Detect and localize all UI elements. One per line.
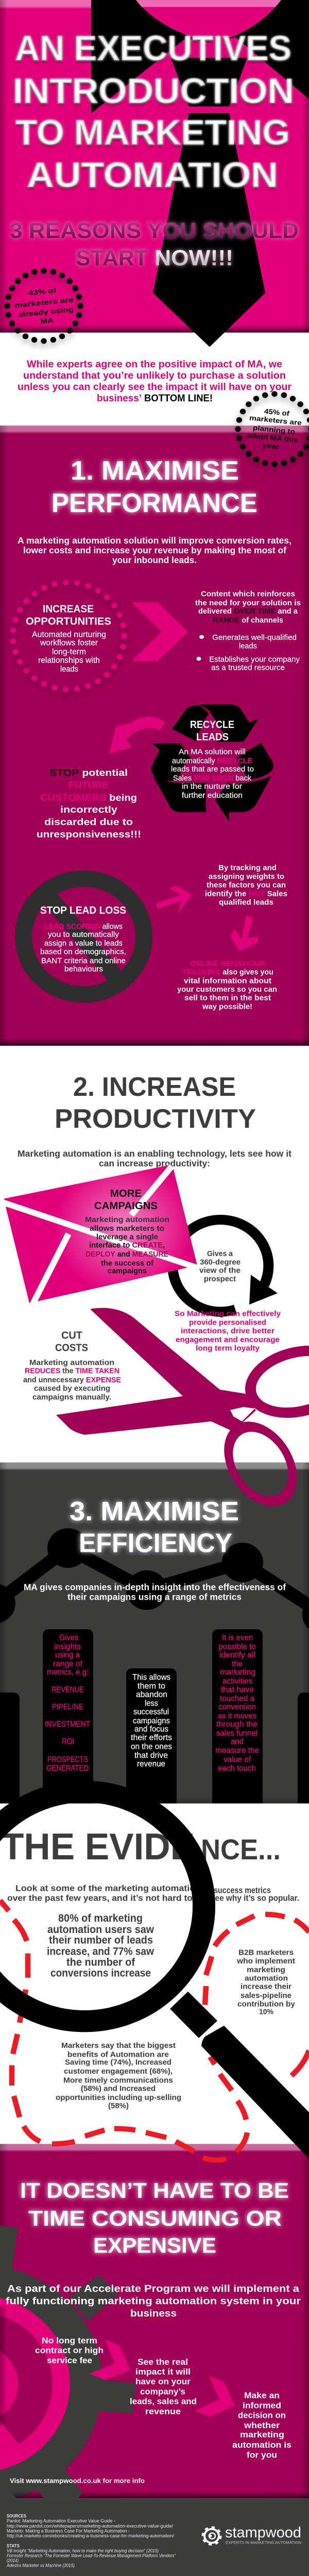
text block: by tracking: By tracking and: [218, 864, 277, 872]
text block: identify all activities: marketing: [220, 1668, 255, 1677]
text block: marketers say: benefits of Automation are: [67, 2051, 169, 2059]
bottom shade: [0, 2492, 309, 2498]
panel: intro text: understand that you’re unlikely to purchase a solution: [23, 370, 286, 381]
panel: increase opportunities: long-term: [52, 648, 86, 656]
badge: 43% of marketers: MA: [40, 316, 54, 325]
text block: stop lead loss: [40, 905, 126, 974]
icon: gear: [0, 2226, 136, 2504]
text block: 360-degree view: [199, 1250, 241, 1283]
text block: sources and stats: Pardot: Marketing Automation Executive Value Guide -: [7, 2518, 115, 2524]
text block: stop potential future customers: discarded due to: [44, 817, 133, 827]
text block: section 1 intro: your inbound leads.: [112, 555, 197, 565]
text block: see the real impact: have on your: [135, 2377, 191, 2386]
icon: envelope: [2, 1165, 198, 1306]
text block: sources and stats: Marketo: Making a Business Case For Marketing Automation -: [7, 2529, 130, 2534]
text block: online behaviour tracking: way possible!: [202, 1003, 252, 1011]
text block: so marketing can: provide personalised: [189, 1319, 266, 1327]
text block: abandon less successful: [131, 1673, 172, 1768]
badge: 45% of marketers: marketers are: [249, 414, 302, 427]
text block: abandon less successful: that drive: [134, 1751, 168, 1760]
text block: more campaigns: CAMPAIGNS: [94, 1200, 158, 1212]
heading: 1. Maximise Performance: [52, 456, 258, 518]
heading: it doesn't have to be: IT DOESN’T HAVE TO BE: [20, 2179, 289, 2202]
text block: more campaigns: leverage a single: [96, 1233, 158, 1241]
text block: see the real impact: leads, sales and: [130, 2396, 197, 2406]
text block: abandon less successful: their efforts: [131, 1734, 172, 1742]
text block: see the real impact: revenue: [145, 2406, 181, 2416]
text block: stop lead loss: based on demographics,: [40, 948, 126, 956]
text block: B2B marketers: [236, 1949, 296, 2016]
text block: metrics bar: range of: [53, 1660, 83, 1668]
chart: red dashed speech bubbles: [0, 1901, 309, 2160]
icon: prohibition sign: [24, 879, 144, 994]
text block: metrics bar: using a: [55, 1651, 80, 1659]
text block: metrics bar: PIPELINE: [52, 1703, 83, 1711]
icon: chevron arrow: [131, 602, 188, 661]
text block: visit website: Visit www.stampwood.co.uk for more info: [10, 2477, 145, 2484]
text block: identify all activities: activities: [222, 1677, 252, 1686]
text block: identify all activities: as it moves: [218, 1712, 256, 1720]
text block: 80% of users: 80% of marketing: [58, 1911, 143, 1924]
text block: cut costs: CUT: [61, 1330, 82, 1341]
text block: recycle leads: in the nurture for: [182, 783, 242, 791]
text block: no long term contract: [35, 2335, 104, 2365]
panel: increase opportunities: relationships with: [38, 656, 100, 665]
text block: accelerate program: [6, 2283, 301, 2319]
text block: stop potential future customers: CUSTOMERS being: [40, 792, 137, 803]
text block: metrics bar: Gives: [59, 1634, 78, 1642]
text block: sources and stats: Forrester Research “The Forrester Wave Lead-To-Revenue Management Platform Vendors”: [7, 2553, 176, 2558]
text block: recycle leads: [171, 719, 254, 800]
text block: content which reinforces: delivered OVER TIME and a: [198, 607, 298, 616]
text block: see the real impact: company’s: [140, 2386, 185, 2396]
badge: 45% of marketers: 45% of: [264, 408, 290, 417]
text block: B2B marketers: automation: [245, 1975, 288, 1982]
text block: abandon less successful: less: [145, 1700, 158, 1708]
text block: accelerate program: As part of our Accelerate Program we will implement a: [7, 2283, 300, 2295]
text block: make an informed decision: [232, 2390, 291, 2460]
text block: 80% of users: increase, and 77% saw: [47, 1945, 154, 1957]
text block: sources and stats: STATS: [7, 2543, 20, 2549]
text block: content which reinforces: as a trusted resource: [211, 664, 285, 672]
text block: by tracking: [205, 864, 287, 907]
text block: section 2 intro: can increase productivity:: [99, 1158, 210, 1168]
text block: B2B marketers: sales-pipeline: [241, 1992, 291, 2000]
panel: increase opportunities: OPPORTUNITIES: [26, 616, 111, 627]
text block: recycle leads: Sales TOO SOON back: [173, 774, 252, 783]
text block: metrics bar: ROI: [62, 1737, 74, 1746]
panel: intro text: unless you can clearly see the impact it will have on your: [18, 381, 291, 393]
text block: make an informed decision: informed: [243, 2400, 281, 2410]
text block: recycle leads: An MA solution will: [179, 748, 246, 756]
text block: content which reinforces: RANGE of channels: [213, 617, 283, 624]
text block: content which reinforces: Generates well-qualified: [212, 634, 297, 642]
badge: 43% of marketers: marketers are: [14, 296, 74, 309]
text block: 80% of users: automation users saw: [47, 1923, 154, 1936]
text block: more campaigns: DEPLOY and MEASURE: [85, 1250, 168, 1259]
text block: evidence intro: success metrics: [214, 1885, 271, 1895]
subtitle: START: [76, 246, 148, 270]
text block: evidence intro: [7, 1883, 299, 1903]
text block: marketers say: Saving time (74%), Increased: [65, 2059, 171, 2067]
text block: accelerate program: business: [130, 2308, 177, 2319]
text block: sources and stats: Adestra Marketer vs Machine (2015): [6, 2563, 75, 2569]
neck highlight: [136, 0, 281, 7]
text block: more campaigns: [85, 1188, 169, 1276]
text block: no long term contract: service fee: [47, 2355, 92, 2365]
text block: make an informed decision: marketing: [240, 2429, 284, 2439]
text block: stop lead loss: BANT criteria and online: [41, 957, 126, 965]
text block: evidence intro: see why it’s so popular.: [211, 1893, 299, 1903]
text block: stop lead loss: assign a value to leads: [44, 940, 123, 948]
panel: section 3 background: [0, 1463, 309, 1803]
text block: stop potential future customers: STOP potential: [49, 768, 128, 778]
text block: content which reinforces: leads: [239, 642, 257, 650]
text block: 360-degree view: prospect: [204, 1275, 236, 1283]
text block: by tracking: assigning weights to: [209, 873, 284, 881]
text block: more campaigns: Marketing automation: [85, 1216, 169, 1224]
title: AUTOMATION: [27, 155, 278, 195]
text block: section 1 intro: [18, 535, 291, 565]
panel: hero header: [0, 0, 309, 347]
text block: identify all activities: [215, 1634, 259, 1773]
text block: section 2 intro: [18, 1148, 291, 1168]
icon: pink arrow down: [230, 916, 259, 951]
subtitle: NOW!!!: [154, 246, 233, 270]
icon: magnifying glass: [0, 1791, 309, 2159]
icon: curved pink arrow: [109, 717, 165, 754]
text block: section 3 intro: their campaigns using a range of metrics: [67, 1592, 242, 1602]
panel: increase opportunities: Automated nurturing: [32, 631, 106, 639]
text block: online behaviour tracking: your customers so you can: [177, 986, 277, 994]
text block: online behaviour tracking: TRACKING also gives you: [182, 969, 273, 976]
title: TO MARKETING: [15, 113, 290, 152]
badge: 43% of marketers: 43% of: [28, 286, 57, 297]
icon: circular arrow: [173, 1219, 278, 1312]
text block: online behaviour tracking: [177, 960, 277, 1011]
text block: identify all activities: sales funnel: [216, 1729, 258, 1738]
logo: stampwood: EXPERTS IN MARKETING AUTOMATION: [226, 2540, 301, 2545]
text block: identify all activities: touched a: [220, 1694, 254, 1703]
gear lower outline: [0, 2467, 82, 2498]
text block: make an informed decision: decision on: [238, 2410, 286, 2420]
title: AN EXECUTIVES: [15, 28, 291, 68]
text block: no long term contract: contract or high: [35, 2345, 104, 2355]
text block: accelerate program: fully functioning marketing automation system in your: [6, 2296, 301, 2307]
text block: 80% of users: their number of leads: [49, 1934, 153, 1946]
text block: section 1 intro: A marketing automation solution will improve conversion rates,: [18, 535, 291, 546]
text block: stop potential future customers: unresponsiveness!!!: [37, 829, 141, 839]
panel: footer background: [0, 2498, 309, 2576]
text block: content which reinforces: the need for your solution is: [195, 599, 301, 607]
text block: identify all activities: through the: [216, 1720, 258, 1729]
heading: The Evidence: NCE...: [201, 1834, 281, 1866]
text block: content which reinforces: Content which reinforces: [201, 590, 295, 598]
badge: 45% of marketers: [238, 394, 309, 464]
text block: abandon less successful: abandon: [136, 1690, 167, 1699]
text block: marketers say: (58%): [108, 2102, 129, 2110]
badge: 45% of marketers: year: [262, 442, 280, 451]
text block: identify all activities: conversion: [218, 1703, 256, 1711]
chart: line with markers: [0, 1528, 309, 1634]
text block: abandon less successful: revenue: [137, 1760, 165, 1768]
panel: increase opportunities: workflows foster: [40, 639, 98, 648]
text block: marketers say: More timely communications: [63, 2077, 173, 2084]
text block: identify all activities: that have: [221, 1686, 254, 1694]
text block: stop lead loss: STOP LEAD LOSS: [40, 905, 126, 916]
text block: online behaviour tracking: ONLINE BEHAVIOUR: [190, 960, 265, 968]
text block: section 3 intro: [24, 1582, 286, 1602]
text block: cut costs: caused by executing: [34, 1385, 110, 1393]
heading: 2. Increase Productivity: 2. INCREASE: [73, 1072, 236, 1102]
text block: 80% of users: [47, 1911, 154, 1979]
text block: identify all activities: identify all: [219, 1651, 255, 1659]
text block: marketers say: [56, 2042, 181, 2110]
icon: jacket and collar: [91, 0, 309, 113]
text block: identify all activities: It is even: [222, 1634, 253, 1642]
icon: chevron one: [90, 2340, 130, 2380]
icon: gear centre rings: [0, 2295, 70, 2472]
text block: metrics bar: REVENUE: [52, 1686, 84, 1694]
text block: stop potential future customers: [37, 768, 141, 839]
panel: increase opportunities: INCREASE: [43, 603, 94, 615]
panel: section 4 background: [0, 2144, 309, 2498]
text block: make an informed decision: automation is: [232, 2440, 291, 2450]
text block: stop lead loss: LEAD SCORING allows: [44, 923, 123, 931]
text block: section 1 intro: lower costs and increase your revenue by making the most of: [23, 545, 286, 555]
panel: increase opportunities: leads: [60, 665, 78, 673]
text block: make an informed decision: whether: [244, 2420, 280, 2430]
badge: 43% of marketers: already using: [18, 306, 74, 318]
heading: 2. Increase Productivity: [55, 1072, 256, 1134]
text block: sources and stats: http://www.pardot.com/whitepapers/marketing-automation-executive-value-guide/: [7, 2523, 173, 2529]
icon: scissors lower handle: [209, 1409, 309, 1519]
text block: marketers say: Marketers say that the biggest: [61, 2042, 176, 2050]
text block: so marketing can: engagement and encourage: [176, 1336, 280, 1344]
icon: neck: [136, 0, 281, 43]
text block: sources and stats: [6, 2514, 176, 2569]
text block: identify all activities: each touch: [218, 1764, 256, 1773]
text block: cut costs: COSTS: [55, 1342, 88, 1353]
text block: marketers say: opportunities including up-selling: [56, 2094, 181, 2102]
text block: so marketing can: [175, 1310, 281, 1352]
title: INTRODUCTION: [13, 71, 294, 111]
text block: abandon less successful: successful: [133, 1708, 169, 1716]
heading: 1. Maximise Performance: 1. MAXIMISE: [71, 456, 239, 486]
text block: so marketing can: So Marketing can effectively: [175, 1310, 281, 1318]
text block: so marketing can: long term loyalty: [196, 1345, 260, 1352]
text block: metrics bar: INVESTMENT: [45, 1720, 90, 1729]
heading: it doesn't have to be: [20, 2179, 289, 2258]
text block: cut costs: campaigns manually.: [32, 1394, 111, 1402]
text block: evidence intro: over the past few years, and it’s not hard to: [7, 1893, 193, 1903]
text block: stop lead loss: you to automatically: [48, 931, 119, 939]
text block: cut costs: Marketing automation: [29, 1359, 114, 1367]
text block: by tracking: qualified leads: [219, 899, 273, 907]
text block: cut costs: [23, 1330, 121, 1402]
text block: section 2 intro: Marketing automation is an enabling technology, lets see how it: [18, 1148, 291, 1159]
text block: abandon less successful: them to: [138, 1682, 165, 1691]
text block: abandon less successful: and focus: [134, 1725, 168, 1734]
text block: section 3 intro: MA gives companies in-depth insight into the effectiveness of: [24, 1582, 286, 1592]
text block: more campaigns: allows marketers to: [90, 1225, 164, 1233]
text block: stop potential future customers: incorrectly: [60, 804, 118, 815]
heading: The Evidence: THE EVIDE: [2, 1825, 195, 1868]
heading: 1. Maximise Performance: PERFORMANCE: [52, 488, 258, 518]
text block: cut costs: REDUCES the TIME TAKEN: [25, 1367, 119, 1376]
panel: intro text: BOTTOM LINE!: [144, 393, 213, 404]
chart: metric bars: [0, 1629, 309, 1803]
text block: more campaigns: interface to CREATE,: [89, 1242, 165, 1250]
text block: recycle leads: LEADS: [196, 731, 229, 743]
icon: recycle symbol: [151, 704, 273, 822]
text block: 360-degree view: view of the: [199, 1267, 241, 1275]
text block: identify all activities: measure the: [215, 1747, 259, 1755]
text block: B2B marketers: contribution by: [237, 2001, 296, 2008]
text block: sources and stats: SOURCES: [7, 2514, 26, 2519]
text block: B2B marketers: increase their: [241, 1983, 291, 1991]
text block: marketers say: (58%) and Increased: [81, 2085, 156, 2093]
text block: 360-degree view: 360-degree: [200, 1259, 241, 1266]
text block: B2B marketers: 10%: [259, 2008, 273, 2016]
text block: abandon less successful: This allows: [132, 1673, 170, 1682]
text block: metrics bar: insights: [54, 1642, 81, 1651]
text block: stop lead loss: behaviours: [64, 965, 103, 974]
text block: online behaviour tracking: sell to them in the best: [184, 994, 271, 1002]
subtitle: [10, 219, 299, 270]
text block: no long term contract: No long term: [42, 2335, 97, 2345]
text block: identify all activities: and: [231, 1737, 244, 1746]
text block: B2B marketers: B2B marketers: [238, 1949, 294, 1957]
text block: 80% of users: the number of: [66, 1956, 135, 1968]
text block: recycle leads: further education: [182, 792, 243, 800]
heading: it doesn't have to be: EXPENSIVE: [93, 2233, 216, 2258]
text block: identify all activities: the: [232, 1660, 243, 1668]
text block: identify all activities: value of: [224, 1755, 251, 1764]
text block: more campaigns: the success of: [101, 1260, 153, 1267]
text block: see the real impact: See the real: [138, 2357, 188, 2367]
panel: increase opportunities: [13, 583, 124, 689]
text block: more campaigns: MORE: [110, 1188, 142, 1199]
text block: sources and stats: VB Insight “Marketing Automation, how to make the right buying decision” (2015): [7, 2548, 159, 2554]
heading: 3. Maximise Efficiency: [70, 1497, 239, 1558]
panel: section 1 background: [0, 426, 309, 1046]
panel: intro text: [18, 359, 291, 404]
text block: B2B marketers: marketing: [247, 1966, 285, 1974]
icon: chevron two: [195, 2376, 235, 2417]
icon: tie knot: [171, 58, 247, 107]
text block: recycle leads: RECYCLE: [190, 719, 234, 731]
text block: sources and stats: (2014): [7, 2558, 19, 2564]
text block: B2B marketers: who implement: [236, 1957, 295, 1965]
panel: intro text: business’: [97, 393, 142, 404]
badge: 43% of marketers: [7, 270, 80, 341]
text block: metrics bar: metrics, e.g:: [47, 1668, 89, 1677]
text block: online behaviour tracking: vital information about: [184, 977, 271, 986]
text block: metrics bar: PROSPECTS: [47, 1755, 88, 1764]
text block: see the real impact: impact it will: [135, 2366, 191, 2377]
logo: stampwood: stampwood: [225, 2524, 301, 2541]
icon: scissors: [56, 1308, 309, 1435]
subtitle: 3 REASONS YOU SHOULD: [10, 219, 299, 243]
panel: intro text: While experts agree on the positive impact of MA, we: [27, 359, 282, 370]
heading: 3. Maximise Efficiency: 3. MAXIMISE: [70, 1497, 239, 1527]
text block: 80% of users: conversions increase: [50, 1967, 151, 1979]
text block: identify all activities: possible to: [218, 1642, 256, 1651]
text block: metrics bar: [45, 1634, 90, 1773]
logo: stampwood: [203, 2524, 301, 2545]
heading: 3. Maximise Efficiency: EFFICIENCY: [79, 1528, 232, 1558]
text block: stop potential future customers: FUTURE: [68, 779, 109, 790]
badge: 45% of marketers: adopt MA this: [246, 431, 299, 444]
text block: make an informed decision: for you: [247, 2450, 277, 2460]
text block: make an informed decision: Make an: [244, 2390, 280, 2400]
text block: marketers say: customer engagement (68%),: [64, 2067, 173, 2076]
badge: 45% of marketers: planning to: [252, 424, 296, 436]
heading: it doesn't have to be: TIME CONSUMING OR: [28, 2207, 282, 2230]
text block: evidence intro: Look at some of the marketing automation: [15, 1883, 201, 1893]
text block: content which reinforces: [195, 590, 301, 672]
text block: content which reinforces: Establishes your company: [209, 656, 300, 664]
text block: 360-degree view: Gives a: [207, 1250, 233, 1258]
heading: 2. Increase Productivity: PRODUCTIVITY: [55, 1104, 256, 1134]
text block: by tracking: identify the HOT Sales: [205, 890, 287, 899]
text block: see the real impact: [130, 2357, 197, 2416]
icon: tie: [153, 113, 265, 347]
text block: cut costs: and unnecessary EXPENSE: [23, 1376, 121, 1384]
title: [13, 28, 294, 195]
text block: sources and stats: http://uk.marketo.com/ebooks/creating-a-business-case-for-marketing-automation/: [7, 2533, 174, 2539]
text block: recycle leads: automatically RECYCLE: [172, 757, 252, 765]
text block: by tracking: these factors you can: [207, 882, 286, 889]
text block: abandon less successful: campaigns: [133, 1717, 170, 1725]
text block: abandon less successful: on the ones: [131, 1742, 172, 1751]
text block: more campaigns: campaigns: [108, 1267, 147, 1276]
text block: so marketing can: interactions, drive better: [181, 1327, 274, 1335]
text block: recycle leads: leads that are passed to: [171, 766, 254, 774]
text block: metrics bar: GENERATED: [46, 1764, 89, 1773]
icon: pink arrow right: [156, 886, 192, 913]
